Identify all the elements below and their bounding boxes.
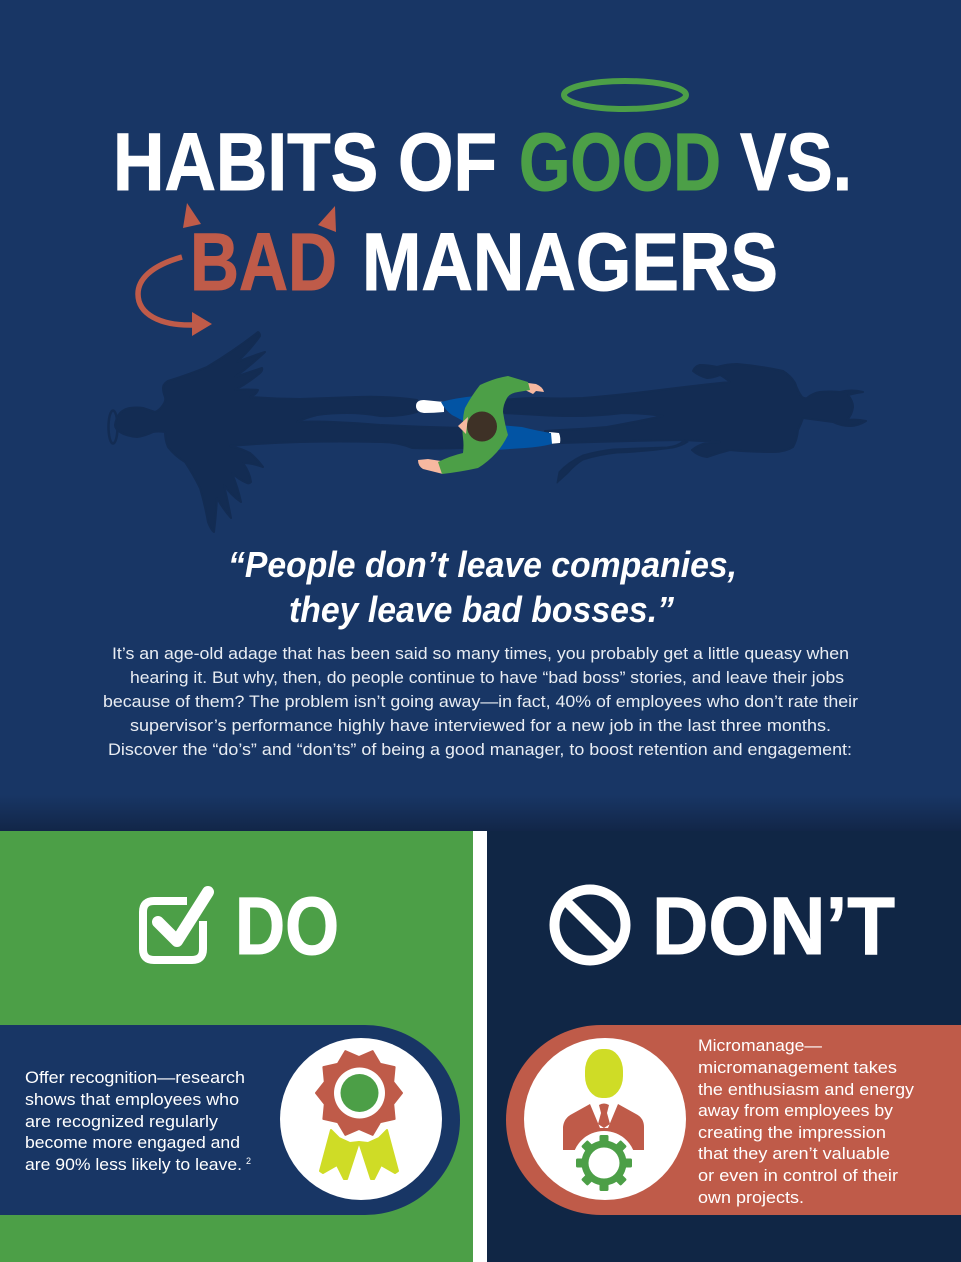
shadow: devil (503, 364, 866, 483)
intro text block: hearing it. But why, then, do people continue to have “bad boss” stories, and leave their jobs (130, 668, 844, 687)
card: recognition (0, 1025, 460, 1215)
intro text block: because of them? The problem isn’t going away—in fact, 40% of employees who don’t rate their (103, 692, 858, 711)
text: micromanage: Micromanage— (698, 1036, 822, 1055)
icon: prohibition sign (554, 890, 626, 960)
icon: devil horns and tail (138, 203, 336, 336)
icon: green halo (564, 81, 686, 109)
shadow: angel (108, 332, 463, 532)
person seen from above (416, 376, 560, 474)
text: recognition: Offer recognition—research (25, 1068, 245, 1087)
quote: they leave bad bosses.” (289, 589, 674, 630)
text: micromanage: away from employees by (698, 1101, 894, 1120)
intro text block (103, 644, 858, 759)
title: MANAGERS (362, 217, 778, 308)
icon: award ribbon (316, 1051, 402, 1179)
text: recognition: 2 (246, 1156, 251, 1166)
text: micromanage: micromanagement takes (698, 1058, 897, 1077)
illustration: person with angel and devil shadows (108, 332, 866, 532)
icon: checkbox (143, 892, 208, 960)
title: HABITS OF (113, 117, 497, 208)
quote: “People don’t leave companies, (228, 544, 737, 585)
card: micromanage (506, 1025, 961, 1215)
text: recognition (25, 1068, 251, 1174)
panel: do (0, 831, 473, 1262)
icon: manager with gear (563, 1049, 644, 1195)
text: recognition: are recognized regularly (25, 1112, 219, 1131)
intro text block: Discover the “do’s” and “don’ts” of being a good manager, to boost retention and engagement: (108, 740, 852, 759)
text: micromanage: or even in control of their (698, 1166, 898, 1185)
heading: do: DO (235, 881, 339, 972)
text: micromanage: the enthusiasm and energy (698, 1080, 915, 1099)
heading: don't: DON’T (652, 881, 895, 972)
text: recognition: are 90% less likely to leave. (25, 1155, 242, 1174)
intro text block: supervisor’s performance highly have interviewed for a new job in the last three months. (130, 716, 831, 735)
quote (228, 544, 737, 630)
text: recognition: become more engaged and (25, 1133, 240, 1152)
intro text block: It’s an age-old adage that has been said so many times, you probably get a little queasy when (112, 644, 849, 663)
text: micromanage: that they aren’t valuable (698, 1144, 890, 1163)
text: micromanage: creating the impression (698, 1123, 886, 1142)
title: VS. (740, 117, 852, 208)
title (113, 117, 852, 308)
title: BAD (190, 217, 337, 308)
text: micromanage (698, 1036, 915, 1207)
panel: don't (487, 831, 961, 1262)
title: GOOD (519, 117, 721, 208)
text: recognition: shows that employees who (25, 1090, 239, 1109)
text: micromanage: own projects. (698, 1188, 804, 1207)
